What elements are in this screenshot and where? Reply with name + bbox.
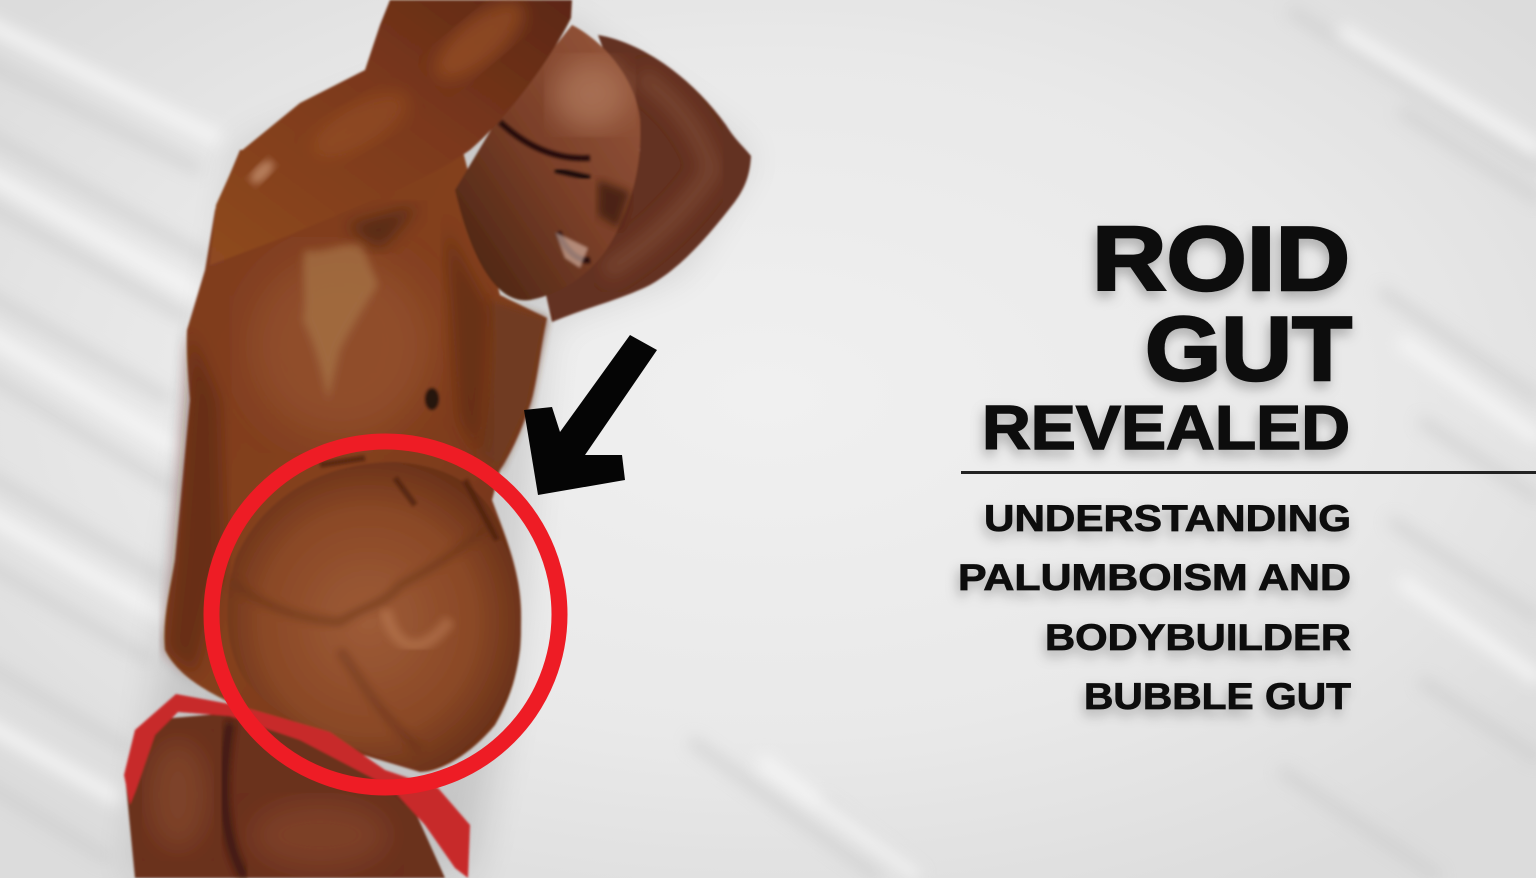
- title: ROID: [1092, 209, 1350, 310]
- torso left shade: [165, 330, 225, 675]
- armpit shadow: [345, 205, 420, 250]
- torso side shadow: [480, 300, 547, 470]
- chest highlight: [250, 255, 430, 435]
- subtitle: BUBBLE GUT: [1084, 676, 1351, 717]
- figure: bodybuilder: [124, 0, 751, 878]
- subtitle: [958, 498, 1351, 717]
- subtitle: PALUMBOISM AND: [958, 557, 1351, 598]
- subtitle: UNDERSTANDING: [984, 498, 1351, 539]
- nipple: [425, 388, 439, 410]
- face details: [500, 122, 590, 260]
- title: [982, 209, 1352, 463]
- figure shadow: [130, 20, 750, 878]
- raised arm: [210, 0, 572, 265]
- red circle highlight: [212, 442, 560, 788]
- back arm: [545, 35, 751, 322]
- thigh: [126, 712, 445, 878]
- title: GUT: [1145, 299, 1352, 400]
- torso: [164, 140, 547, 772]
- red trunks: [124, 694, 470, 878]
- head: [455, 25, 640, 300]
- divider line: [961, 471, 1536, 474]
- subtitle: BODYBUILDER: [1045, 617, 1351, 658]
- title: REVEALED: [982, 394, 1350, 463]
- arrow: [524, 335, 657, 495]
- belly: [227, 462, 521, 769]
- chest veins: [303, 244, 378, 400]
